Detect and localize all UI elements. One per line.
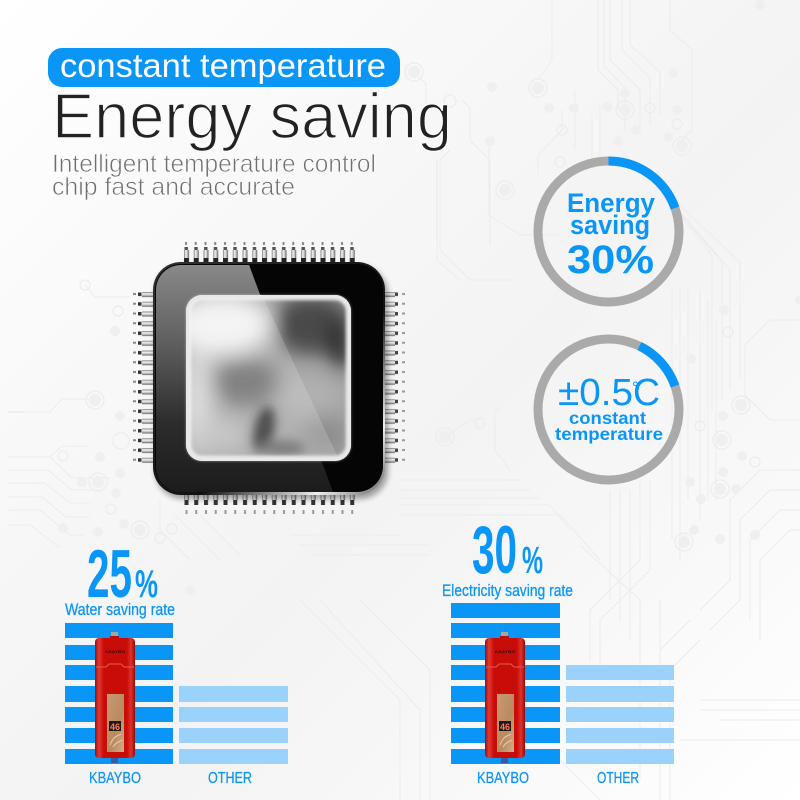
water heater product	[95, 632, 135, 763]
ring: energy saving 30%: 30%	[567, 238, 654, 282]
ring: energy saving 30%	[538, 161, 679, 302]
ring: constant temperature 0.5C: ±0.5	[558, 372, 633, 414]
label: electricity saving rate: Electricity saving rate	[442, 581, 573, 600]
chip shadow	[155, 266, 388, 499]
label: OTHER: OTHER	[208, 770, 252, 787]
water heater product: 46	[500, 722, 510, 732]
label: OTHER: OTHER	[597, 770, 639, 787]
water heater product: KBAYBO	[105, 650, 125, 654]
title: Energy saving: Energy saving	[52, 80, 452, 152]
chip	[133, 242, 405, 514]
pill heading: constant temperature: constant temperature	[60, 47, 386, 84]
subtitle text	[52, 150, 376, 201]
chip inner glass window	[172, 295, 352, 462]
ring: constant temperature 0.5C: C	[633, 372, 660, 414]
chart: electricity saving rate	[442, 512, 674, 787]
ring: constant temperature 0.5C: constant	[569, 408, 646, 428]
bars: KBAYBO	[451, 603, 560, 764]
subtitle text: Intelligent temperature control	[52, 150, 376, 178]
subtitle text: chip fast and accurate	[52, 173, 295, 201]
ring: energy saving 30%: saving	[570, 210, 650, 240]
water heater product: 46	[110, 722, 120, 732]
stat: 25%: %	[135, 563, 158, 606]
chip body	[150, 262, 385, 495]
ring: constant temperature 0.5C	[538, 339, 679, 480]
bars: OTHER	[179, 686, 288, 764]
chart: water saving rate	[65, 536, 288, 787]
ring: energy saving 30%: Energy	[567, 188, 655, 218]
bars: KBAYBO	[65, 623, 173, 764]
stat: 25%: 25	[87, 536, 132, 612]
label: KBAYBO: KBAYBO	[477, 770, 529, 787]
stat: 30%: 30	[472, 512, 517, 588]
label: KBAYBO: KBAYBO	[89, 770, 141, 787]
label: water saving rate: Water saving rate	[65, 600, 175, 619]
ring: constant temperature 0.5C: °	[632, 378, 639, 397]
chip pins	[133, 242, 405, 514]
stat: 30%: %	[522, 540, 543, 582]
bars: OTHER	[566, 665, 674, 764]
water heater product: KBAYBO	[495, 650, 515, 654]
ring: constant temperature 0.5C: temperature	[555, 424, 663, 444]
water heater product	[485, 632, 525, 763]
